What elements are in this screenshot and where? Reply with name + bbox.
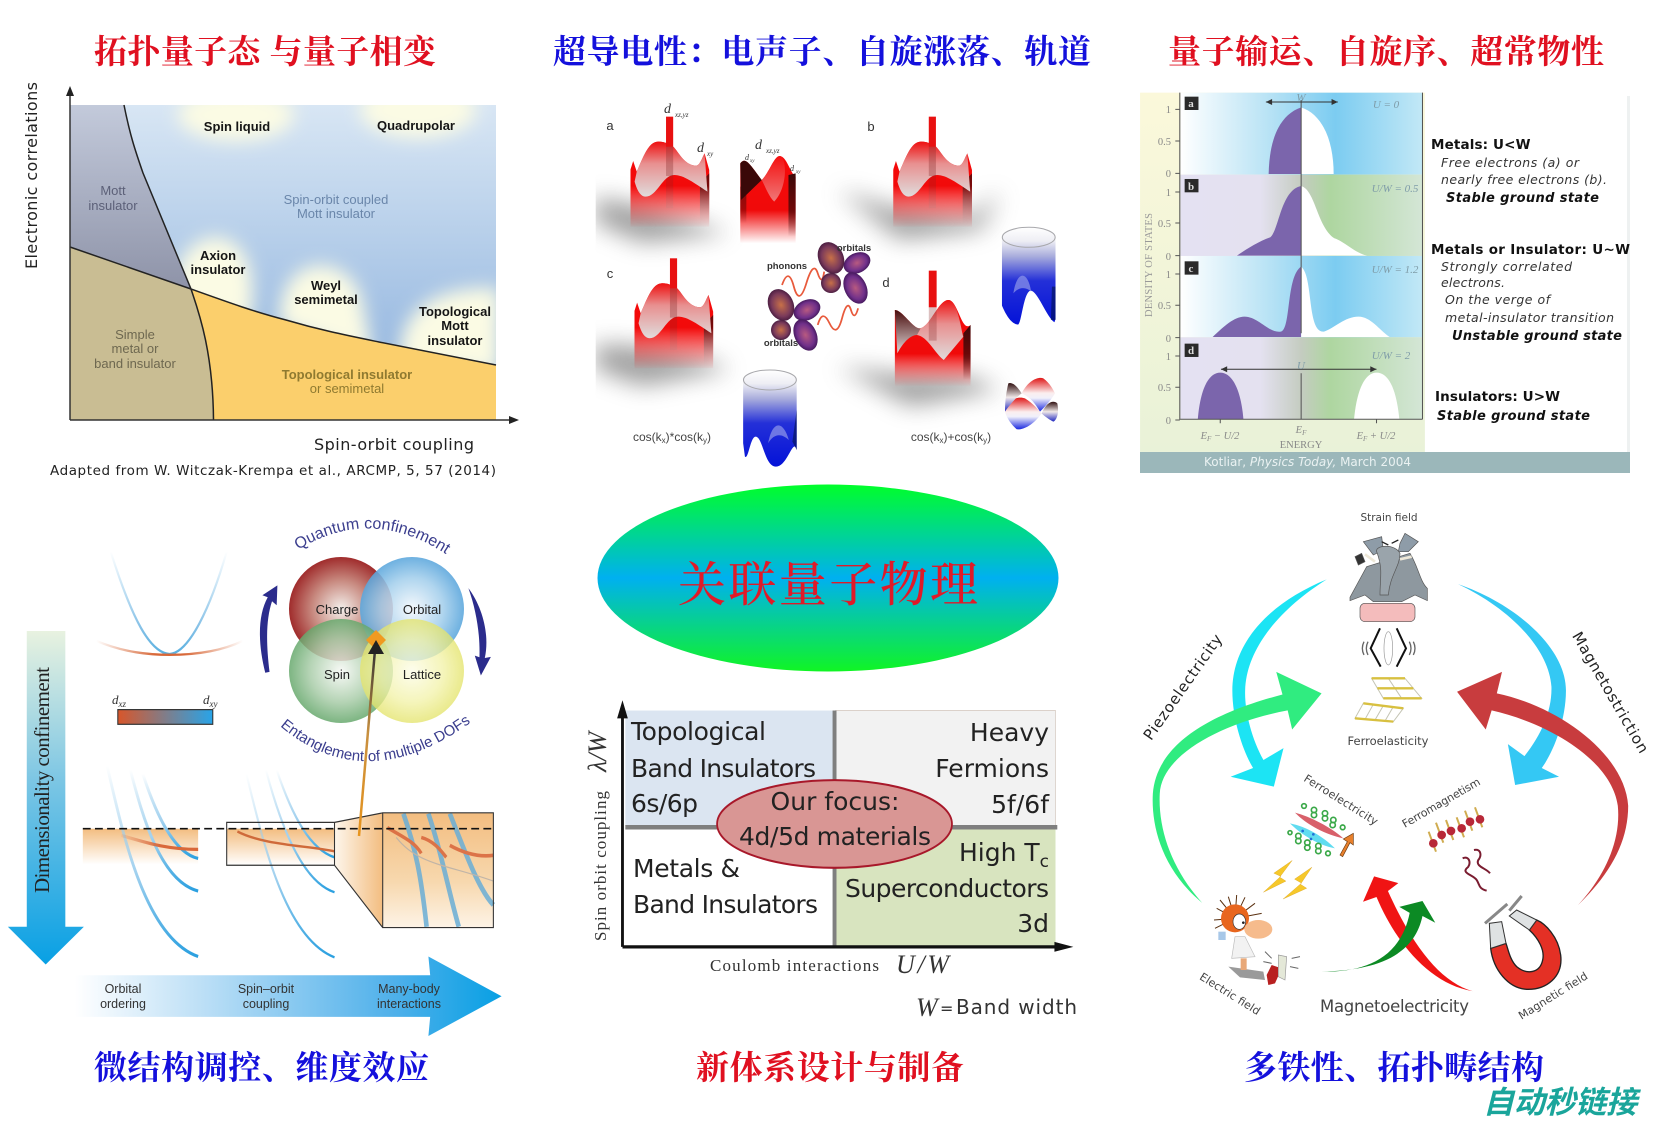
watermark: 自动秒链接 [1483,1085,1641,1120]
orbital symbols: d [664,102,672,117]
phonons and orbital labels: orbitals [764,338,798,349]
Fermi level dashed line [83,827,493,831]
x axis symbol: U/W [896,950,951,979]
icon: ferromagnetic spins [1429,807,1484,852]
centre oval: correlated quantum physics: 关联量子物理 [678,559,978,612]
orbital colour bar [118,710,213,724]
regime notes [1431,137,1630,424]
energy axis labels: E [1357,431,1363,442]
energy axis labels: + U/2 [1367,431,1396,442]
muted phase labels: insulator [88,198,138,213]
regime notes: metal-insulator transition [1445,310,1614,325]
tick labels: 0.5 [1158,383,1171,394]
phonons and orbital labels: phonons [767,261,807,272]
phonons and orbital labels [764,243,871,349]
blurred surface shadows [596,190,999,407]
band surface a2 [740,156,796,243]
icon: ferroelastic lattice [1355,678,1422,722]
y axis label: Spin orbit coupling [591,790,610,941]
band surface c [634,258,713,368]
band width note: W [916,993,940,1022]
colour bar labels: xy [208,699,218,709]
muted phase labels: Spin-orbit coupled [284,192,388,207]
curved text: quantum confinement: Quantum confinement [295,520,450,554]
regime notes: Stable ground state [1446,191,1599,206]
phase labels: Spin liquid [204,119,270,134]
blue bowl surface right [1002,227,1056,325]
sub-panel letters: b [867,119,875,134]
arrow: piezoelectricity down [1231,579,1327,787]
row tag letters: c [1189,263,1194,275]
muted phase labels: Mott [100,183,126,198]
U over W labels: U/W = 2 [1372,350,1411,362]
phase labels: insulator [191,262,245,277]
tick labels: 1 [1166,105,1171,116]
quadrant labels: Fermions [935,754,1049,783]
panel: microstructure and dimensionality [8,520,502,1036]
quadrant labels: 6s/6p [631,789,698,818]
band width note [916,993,1077,1022]
regime notes: On the verge of [1445,292,1552,307]
labels: Electric field [1197,970,1263,1018]
axis labels on horizontal arrow: ordering [100,997,146,1011]
orbital symbols: d [790,164,795,173]
arrow: piezoelectricity up [1153,672,1322,903]
quadrant labels: High T [959,838,1040,867]
phase labels: Weyl [311,278,341,293]
band curves: many-body zoom [387,814,493,927]
energy axis labels: F [1362,435,1368,443]
formula labels: ) [707,430,711,444]
Venn diagram [289,557,464,723]
orbital symbols: xz,yz [674,111,689,119]
band width note: = [940,999,953,1018]
sub-panel letters: a [606,118,614,133]
regime notes: Strongly correlated [1441,259,1572,274]
quadrant: heavy fermions [836,711,1056,826]
icon: elephant [1350,533,1427,622]
labels: Strain field [1360,512,1418,524]
heading: multiferroics: 多铁性、拓扑畴结构 [1244,1050,1544,1087]
phase labels: semimetal [294,292,358,307]
muted phase labels: Simple [115,327,155,342]
quadrant labels: Metals & [633,854,740,883]
axis labels on horizontal arrow: coupling [243,997,289,1011]
axis labels on horizontal arrow: Orbital [105,982,141,996]
zoom boxes [227,813,493,928]
width and interaction arrows [1221,99,1377,372]
regime notes: Metals or Insulator: U~W [1431,242,1630,258]
labels [1140,512,1652,1022]
credit text: Kotliar, Physics Today, March 2004 [1204,455,1411,469]
regime notes: Metals: U<W [1431,137,1531,153]
arrow: magnetoelectric red [1363,876,1473,991]
arrow: magnetostriction up [1457,672,1628,905]
phase region: topological insulator [191,289,496,420]
quadrant labels: Band Insulators [633,890,818,919]
muted phase labels: metal or [112,341,159,356]
phonons and orbital labels: orbitals [837,243,871,254]
regime notes: electrons. [1441,275,1505,290]
formula labels: x [939,436,943,445]
row b background [1180,175,1422,256]
Venn arrows [260,585,491,675]
heading: topological states: 拓扑量子态 与量子相变 [94,34,437,71]
muted phase labels: Mott insulator [297,206,376,221]
row tag letters [1188,98,1194,357]
band surface d [895,271,971,387]
axes and grid lines [1175,93,1422,423]
row a background [1180,93,1422,175]
quadrant labels: Superconductors [845,874,1049,903]
free-electron parabola [96,552,243,655]
source credit: Adapted from W. Witczak-Krempa et al., ARCMP, 5, 57 (2014) [50,463,496,479]
panel: materials matrix [583,700,1077,1022]
phonon waves [782,268,858,330]
formula labels: x [662,436,666,445]
labels: Magnetic field [1516,970,1590,1022]
quadrant: high Tc superconductors [836,829,1056,946]
regime notes: Unstable ground state [1452,329,1622,344]
U over W labels: U [1297,360,1306,372]
DOS curve U/W=0.5 [1237,186,1367,256]
y axis label: Electronic correlations [22,82,41,269]
labels: Ferromagnetism [1400,775,1483,831]
muted phase labels: band insulator [94,356,177,371]
colour bar labels: d [203,692,210,707]
phase labels: Mott [441,318,469,333]
tick labels: 0 [1166,334,1171,345]
U over W labels: W [1296,92,1306,104]
phase labels [191,118,491,382]
formula labels: )+cos(k [943,430,984,444]
panel: superconductivity bands [596,102,1058,467]
quadrant: topological band insulators [625,711,833,826]
quadrant labels [630,717,1050,938]
labels: Ferroelasticity [1348,734,1429,748]
tick labels: 0 [1166,169,1171,180]
icon: strain symbol [1362,628,1415,667]
icon: ferroelectric structure [1288,804,1353,857]
Venn labels [316,602,441,682]
glow blobs for exotic phases [174,105,496,364]
tick labels: 0.5 [1158,219,1171,230]
icon: elephant, strain symbol and ferroelastic lattice [1350,533,1427,722]
regime notes: Free electrons (a) or [1441,155,1580,170]
orbital symbols: d [697,141,705,156]
tick labels: 0 [1166,416,1171,427]
formula labels: cos(k [911,430,939,444]
regime notes: Insulators: U>W [1435,389,1560,405]
U over W labels: U/W = 1.2 [1372,264,1419,276]
formula labels: y [983,436,987,445]
energy axis labels: F [1206,435,1212,443]
tick labels: 1 [1166,352,1171,363]
phase labels: Topological [419,304,491,319]
centre oval: correlated quantum physics [598,484,1058,672]
Fermi-level shading [83,813,493,928]
energy axis labels: E [1201,431,1207,442]
plot background [1140,93,1425,452]
Venn labels: Spin [324,667,350,682]
y axis symbol: λ/W [583,730,612,773]
tick labels: 0.5 [1158,137,1171,148]
icon: startled scientist [1214,895,1300,985]
tick labels: 0 [1166,252,1171,263]
regime notes: Stable ground state [1437,409,1590,424]
phase labels: Topological insulator [282,367,412,382]
energy axis labels: ENERGY [1280,440,1323,451]
quadrant labels: 4d/5d materials [739,822,931,851]
Venn labels: Lattice [403,667,441,682]
phase labels: Quadrupolar [377,118,455,133]
axis labels on horizontal arrow: Many-body [378,982,441,996]
rotated arrow label: Dimensionality confinement [30,667,54,893]
axis labels on horizontal arrow: Spin–orbit [238,982,295,996]
orbital symbols: xz,yz [765,147,780,155]
sub-panel letters: c [607,266,614,281]
formula labels [633,430,991,445]
icon: magnetic waves [1463,850,1490,891]
x axis label: Spin-orbit coupling [314,435,474,454]
row c background [1180,256,1422,337]
arrow: magnetoelectric green [1321,901,1435,972]
band curves: spin-orbit coupling [237,770,335,957]
formula labels: )*cos(k [666,430,704,444]
pointer arrow to centre [359,640,384,836]
orbital symbols [664,102,801,175]
arrow: magnetostriction down [1458,584,1566,785]
DOS curve U=0 [1269,107,1334,174]
panel: topological phase diagram [22,82,519,479]
band width note: Band width [956,995,1077,1019]
labels: Magnetostriction [1568,629,1652,756]
sub-panel letters: d [882,275,890,290]
orbital symbols: d [755,138,763,153]
row tag letters: b [1188,181,1194,193]
energy axis labels: F [1301,429,1307,437]
x axis label: Coulomb interactions [710,956,879,975]
colour bar labels: xz [118,699,126,709]
orbital cluster lower [763,285,824,355]
row d background [1180,337,1422,419]
heading: new system design: 新体系设计与制备 [696,1050,964,1087]
muted phase labels [88,183,388,396]
formula labels: ) [987,430,991,444]
curved text: entanglement: Entanglement of multiple DOFs [281,717,470,762]
small saddle surface [1005,378,1058,429]
phase labels: insulator [428,333,482,348]
energy axis labels: − U/2 [1211,431,1240,442]
icon: horseshoe magnet [1485,896,1561,989]
tick labels: 0.5 [1158,301,1171,312]
colour bar labels: d [112,692,118,707]
labels: Magnetoelectricity [1320,997,1469,1016]
regime notes: nearly free electrons (b). [1441,172,1607,187]
quadrant labels: 3d [1017,909,1049,938]
icon: ferroelectric structure and spins [1288,804,1490,891]
phase labels: Axion [200,248,236,263]
quadrant labels: c [1040,852,1049,872]
orbital cluster upper [813,238,874,308]
credit bar [1140,452,1630,473]
tick labels [1158,105,1171,427]
axes [617,700,1073,952]
panel: multiferroics [1140,512,1652,1022]
axis labels on horizontal arrow [100,982,441,1011]
phase region: spin-orbit coupled Mott insulator [70,105,496,420]
focus ellipse [717,780,952,868]
orbital symbols: xy [749,159,755,164]
energy axis labels [1200,425,1396,451]
y axis label: DENSITY OF STATES [1144,213,1155,317]
orbital symbols: d [745,153,750,162]
vertical arrow: dimensionality confinement [8,631,84,964]
energy axis labels: E [1296,425,1302,436]
labels: Ferroelectricity [1301,772,1381,828]
heading: superconductivity: 超导电性：电声子、自旋涨落、轨道 [553,34,1091,71]
orbital symbols: xy [795,170,801,175]
tick labels: 1 [1166,270,1171,281]
central diamond [366,630,386,650]
phase region: simple metal [70,247,214,420]
phase region: Mott insulator [70,105,191,289]
band curves: orbital ordering [107,766,198,957]
phase boundaries [70,105,496,420]
horizontal arrow: interactions [75,957,502,1036]
Venn labels: Orbital [403,602,441,617]
tick labels: 1 [1166,188,1171,199]
DOS curve U/W=1.2 [1213,267,1390,337]
orbital symbols: xy [706,150,714,158]
axis labels on horizontal arrow: interactions [377,997,441,1011]
Venn labels: Charge [316,602,358,617]
icon: lightning bolts [1263,860,1312,899]
quadrant labels: Band Insulators [631,754,816,783]
U over W labels: U = 0 [1373,99,1400,111]
band surface a [630,117,709,227]
DOS curve U/W=2 [1198,373,1399,419]
quadrant labels: Topological [630,717,766,746]
sub-panel letters [606,118,890,290]
row tags [1185,97,1198,357]
quadrant labels: Heavy [970,718,1049,747]
heading: microstructure: 微结构调控、维度效应 [94,1050,429,1087]
colour bar labels [112,692,218,709]
row tag letters: d [1188,345,1194,357]
row tag letters: a [1188,98,1194,110]
labels: Piezoelectricity [1140,631,1226,743]
quadrant dividers [625,711,1057,946]
muted phase labels: or semimetal [310,381,384,396]
formula labels: y [703,436,707,445]
band surface b [893,117,972,227]
U over W labels: U/W = 0.5 [1372,183,1419,195]
axes [70,92,512,420]
blue bowl surface left [743,370,797,467]
heading: quantum transport: 量子输运、自旋序、超常物性 [1168,34,1604,71]
quadrant labels: 5f/6f [991,790,1050,819]
U over W labels [1296,92,1419,372]
panel: density of states [1140,92,1630,473]
formula labels: cos(k [633,430,662,444]
quadrant labels: Our focus: [771,787,899,816]
